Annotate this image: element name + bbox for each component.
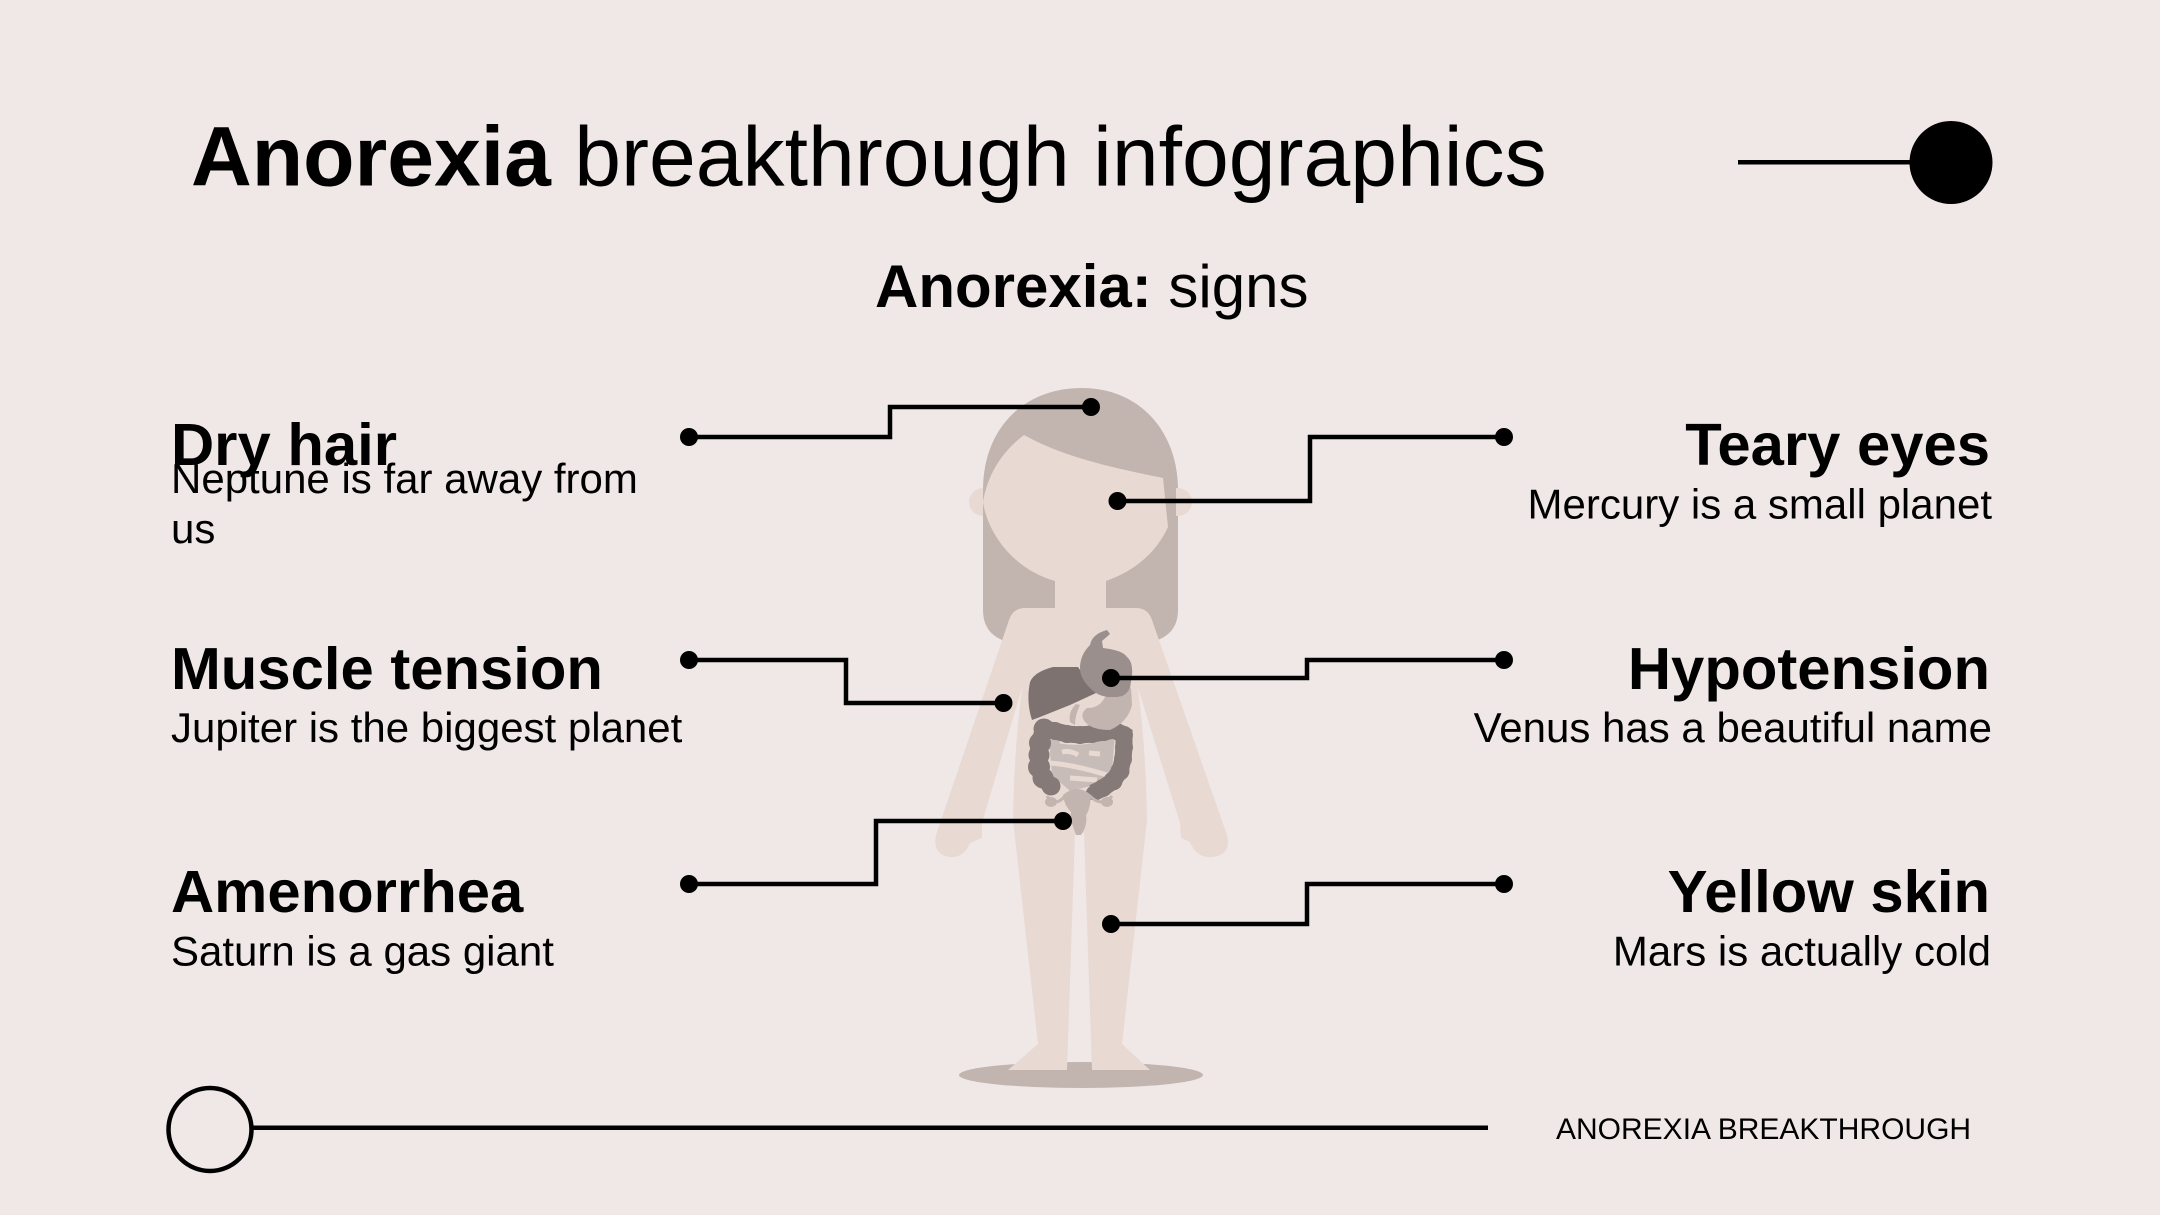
text block: yellow skin: Mars is actually cold: [1613, 928, 1991, 974]
text block: muscle tension: Jupiter is the biggest planet: [171, 704, 683, 751]
text block: yellow skin: Yellow skin: [1668, 858, 1990, 925]
text block: yellow skin: [1613, 858, 1991, 974]
title: Anorexia breakthrough infographics: [191, 110, 1547, 204]
hair: [983, 388, 1178, 640]
text block: hypotension: Hypotension: [1628, 635, 1990, 702]
connector: yellow skin: [1102, 875, 1513, 933]
text block: amenorrhea: Amenorrhea: [171, 858, 524, 925]
organ: colon: [1028, 718, 1133, 800]
footer line with outlined circle: [168, 1088, 1488, 1171]
body figure illustration: [935, 388, 1228, 1088]
text block: dry hair: us: [171, 505, 215, 552]
connector: amenorrhea: [680, 812, 1072, 893]
text block: amenorrhea: Saturn is a gas giant: [171, 928, 554, 974]
organ: lower stomach: [1082, 688, 1132, 730]
text block: dry hair: Dry hair: [171, 411, 397, 478]
footer label: ANOREXIA BREAKTHROUGH: [1556, 1113, 1971, 1146]
organ: small intestine: [1049, 733, 1115, 791]
connector: hypotension: [1102, 651, 1513, 687]
text block: dry hair: [171, 411, 638, 552]
text block: teary eyes: [1528, 411, 1992, 528]
shadow: [959, 1062, 1203, 1088]
text block: muscle tension: [171, 635, 683, 751]
ears: [969, 488, 1192, 516]
organ: stomach: [1080, 630, 1132, 697]
text block: teary eyes: Teary eyes: [1685, 411, 1990, 478]
icon: header line with filled dot: [1738, 121, 1992, 204]
text block: amenorrhea: [171, 858, 554, 974]
organ: liver: [1028, 667, 1096, 720]
torso, arms and legs: [935, 608, 1228, 1070]
subtitle: Anorexia: signs: [875, 253, 1308, 320]
text block: hypotension: [1474, 635, 1992, 751]
connector: dry hair: [680, 398, 1100, 446]
face and neck: [983, 435, 1168, 615]
text block: muscle tension: Muscle tension: [171, 635, 603, 702]
organ: pancreas: [1070, 704, 1080, 725]
connector: teary eyes: [1108, 428, 1513, 510]
text block: teary eyes: Mercury is a small planet: [1528, 480, 1992, 528]
connector: muscle tension: [680, 651, 1012, 712]
text block: dry hair: Neptune is far away from: [171, 455, 638, 502]
text block: hypotension: Venus has a beautiful name: [1474, 704, 1992, 751]
organ: reproductive system: [1045, 789, 1113, 835]
